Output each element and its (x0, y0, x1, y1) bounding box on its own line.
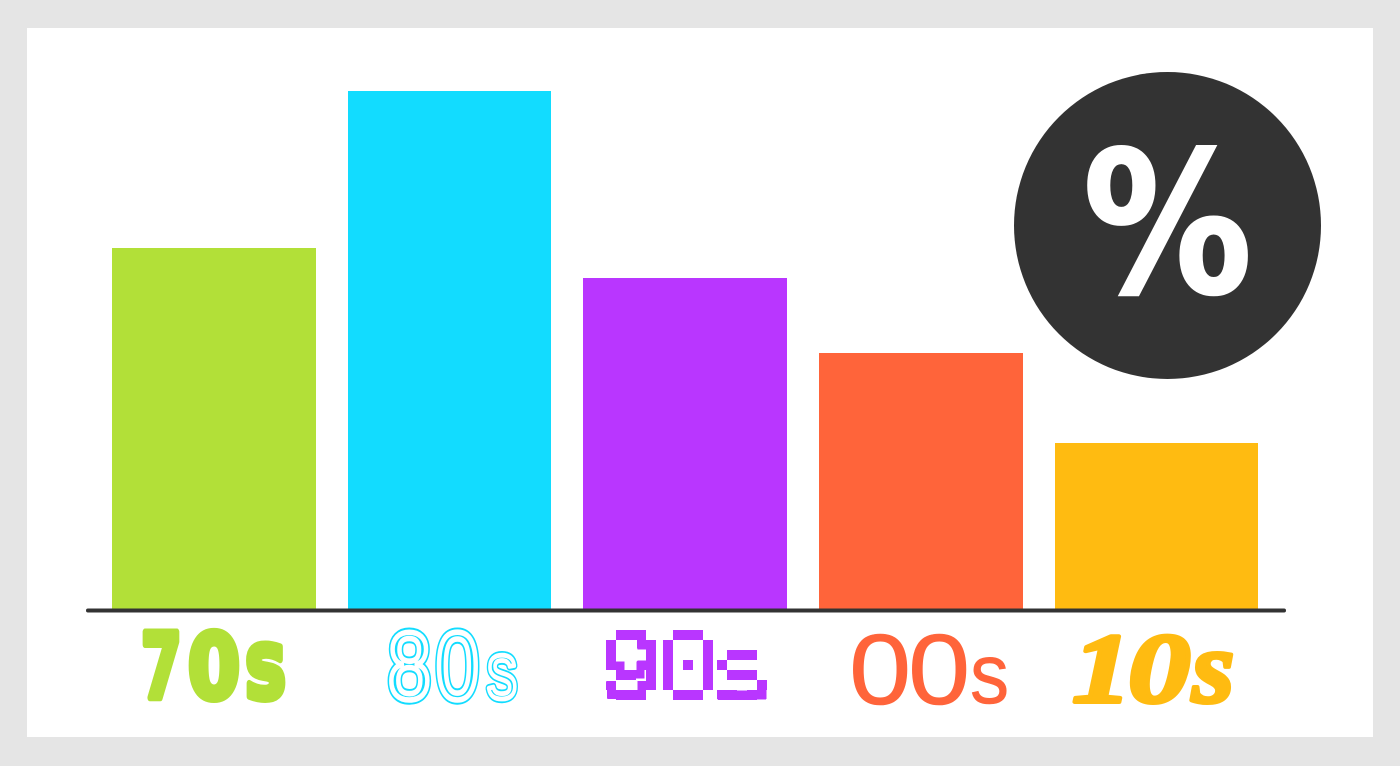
bar: 70s (112, 248, 316, 610)
label: 00s (849, 615, 1009, 726)
label: 10s: 0 (1128, 614, 1190, 724)
label: 80s: s (487, 626, 517, 715)
label: 90s: 0 (656, 615, 720, 732)
label: 80s: 0 (436, 613, 479, 720)
bar: 80s (348, 91, 551, 610)
bar: 90s (583, 278, 787, 610)
label: 00s: 0 (908, 615, 970, 726)
label: 80s: 8 (388, 613, 431, 720)
label: 00s: s (970, 627, 1009, 722)
label: 70s: 0 (188, 614, 240, 720)
label: 70s (141, 608, 286, 721)
label: 70s: 7 (141, 615, 182, 719)
label: 10s: s (1191, 610, 1234, 725)
bar: 00s (819, 353, 1023, 610)
label: 80s (388, 613, 517, 720)
label: 10s: 1 (1072, 613, 1132, 724)
label: 80s: 0 (436, 613, 479, 720)
label: 70s: s (245, 608, 286, 721)
label: 90s (599, 615, 774, 732)
label: 80s: 8 (388, 613, 431, 720)
label: 90s: s (710, 623, 774, 729)
icon: percent badge: % (1083, 111, 1252, 339)
axis line (88, 608, 1284, 612)
label: 90s: 9 (599, 615, 663, 732)
label: 00s: 0 (849, 615, 911, 726)
label: 80s: s (487, 626, 517, 715)
icon: percent badge (1014, 72, 1321, 379)
bar: 10s (1055, 443, 1258, 610)
label: 10s (1072, 610, 1234, 725)
